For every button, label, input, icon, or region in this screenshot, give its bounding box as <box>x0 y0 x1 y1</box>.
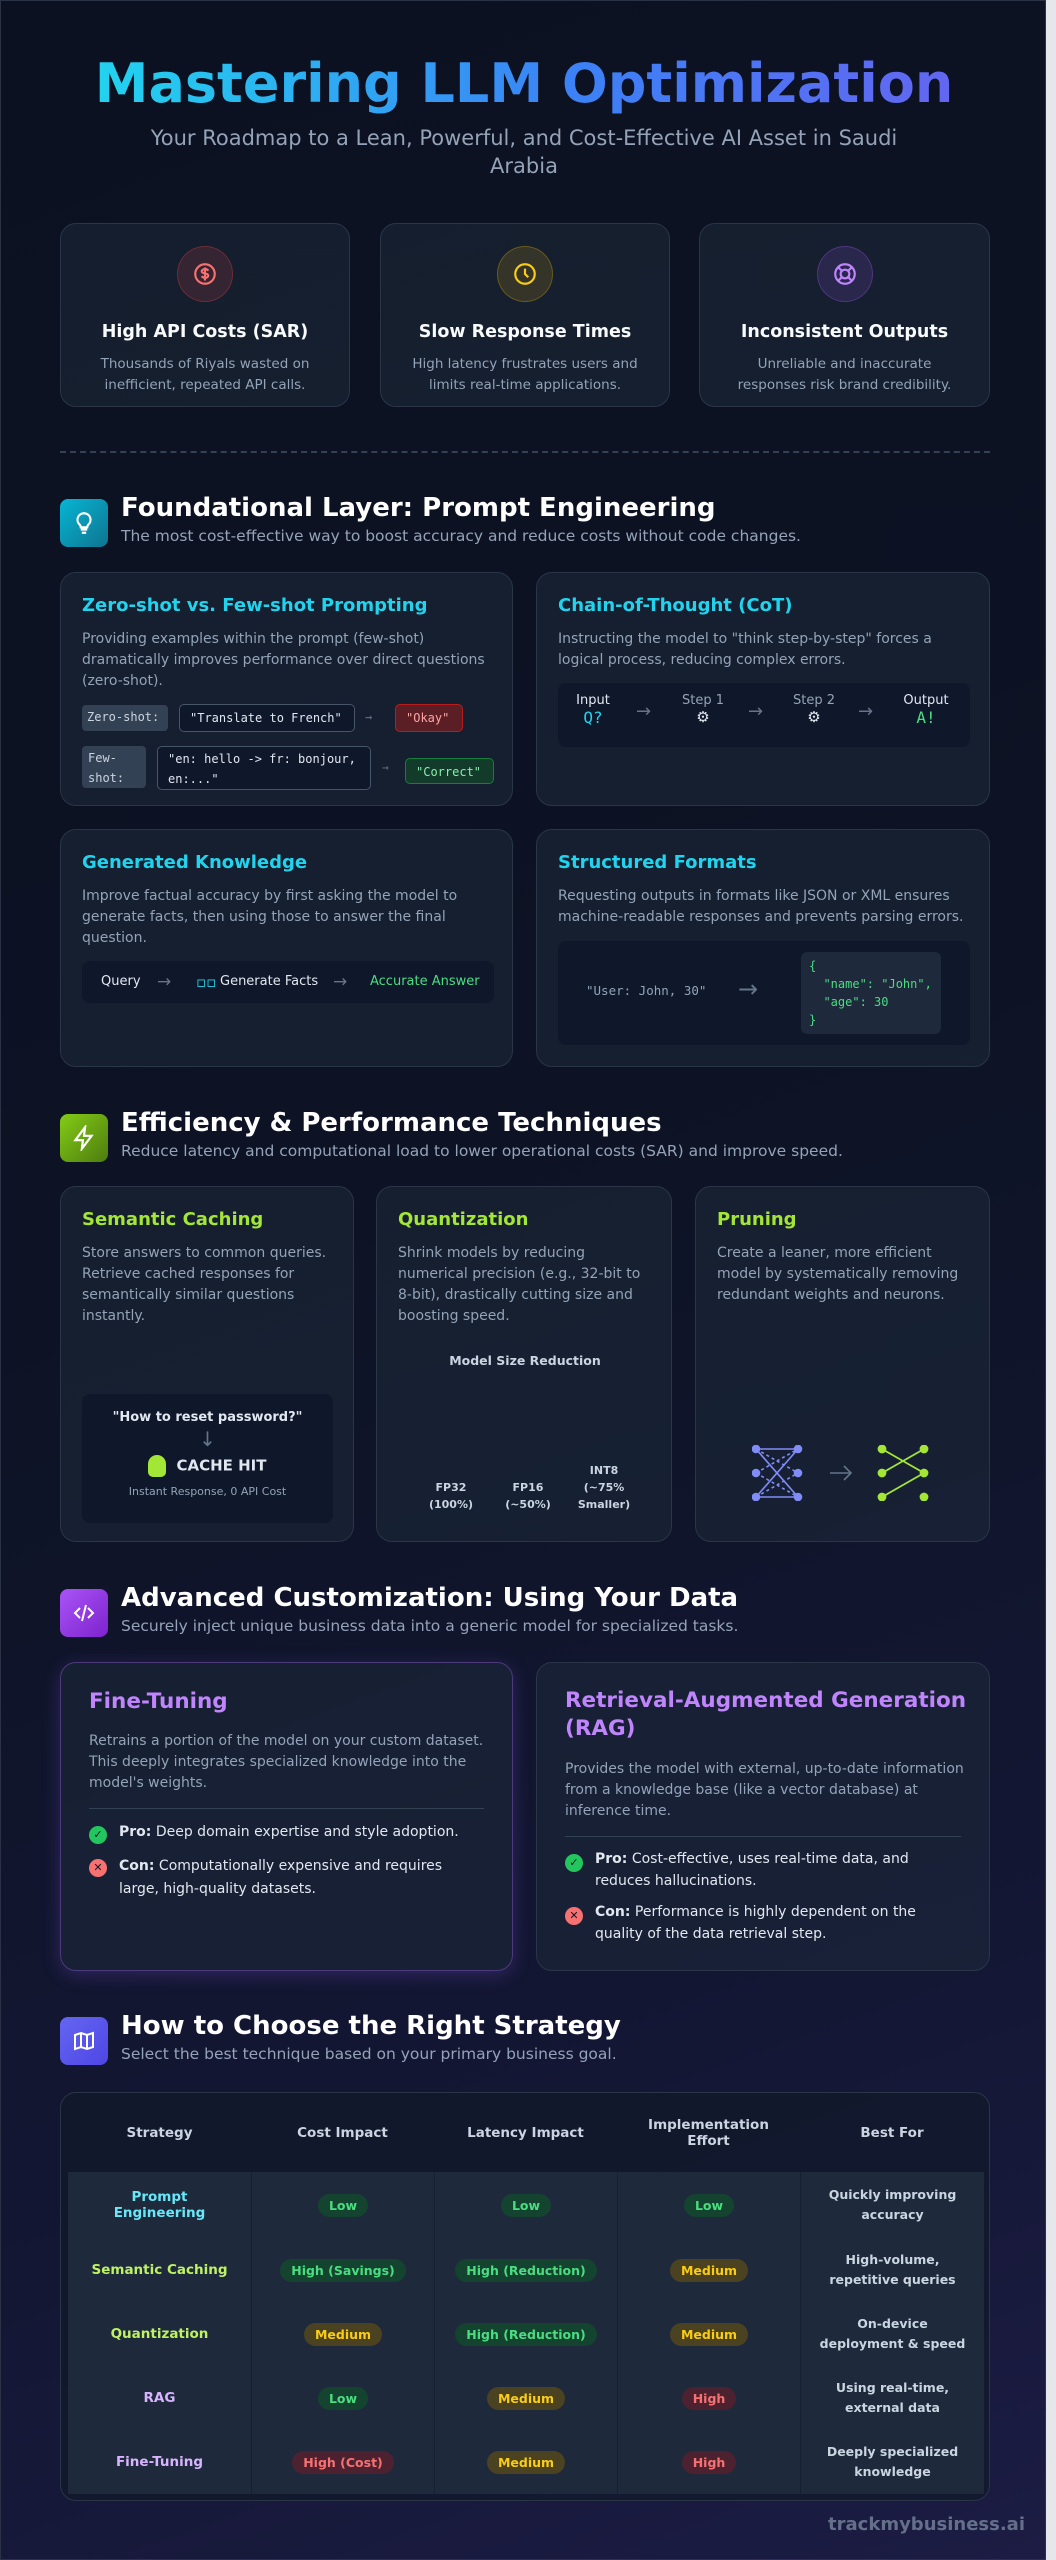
table: strategy comparison: High <box>693 2454 725 2470</box>
panel: zero-shot vs few-shot <box>60 572 513 806</box>
diagram: CoT steps: → <box>858 701 873 722</box>
table: strategy comparison: Medium <box>498 2454 554 2470</box>
panel: chain of thought <box>536 572 990 806</box>
table: strategy comparison: Low <box>329 2390 357 2406</box>
diagram: cache hit: CACHE HIT <box>176 1456 266 1474</box>
diagram: CoT steps <box>558 683 970 747</box>
diagram: text to JSON: { "name": "John", "age": 30 } <box>809 959 932 1027</box>
zero-shot example row: Zero-shot: <box>87 710 159 724</box>
table: strategy comparison: RAG <box>144 2390 175 2406</box>
diagram: knowledge flow: ▫▫ <box>196 973 216 991</box>
chart: model size reduction: Smaller) <box>578 1498 630 1511</box>
table: strategy comparison: Cost Impact <box>297 2124 388 2140</box>
table: strategy comparison: Medium <box>681 2326 737 2342</box>
panel: quantization: Quantization <box>398 1209 528 1230</box>
chart: model size reduction: (~50%) <box>505 1498 551 1511</box>
icon: currency <box>177 246 233 302</box>
panel: generated knowledge: Improve factual accuracy by first asking the model to generate facts, then using those to answer the final question. <box>82 888 457 946</box>
diagram: knowledge flow: Generate Facts <box>220 974 318 989</box>
panel: fine-tuning: Retrains a portion of the model on your custom dataset. This deeply integrates specialized knowledge into the model's weights. <box>89 1733 483 1791</box>
few-shot example row: shot: <box>88 771 124 785</box>
heading: choose strategy <box>60 2011 621 2065</box>
diagram: text to JSON <box>558 941 970 1045</box>
panel: pruning: Create a leaner, more efficient model by systematically removing redundant weights and neurons. <box>717 1245 958 1303</box>
zero-shot example row: → <box>365 710 372 724</box>
chart: model size reduction: FP32 <box>436 1481 466 1494</box>
con item: ✕ <box>569 1909 579 1922</box>
table: strategy comparison: High (Savings) <box>291 2262 395 2278</box>
panel: high API costs: Thousands of Riyals wasted on <box>101 356 309 372</box>
diagram: CoT steps: → <box>748 701 763 722</box>
panel: zero-shot vs few-shot: Providing examples within the prompt (few-shot) dramatically improves performance over direct questions (zero-shot). <box>82 631 485 689</box>
diagram: CoT steps: Step 2 <box>793 693 835 708</box>
pro item: Pro: Deep domain expertise and style adoption. <box>119 1824 459 1840</box>
table: strategy comparison: On-device <box>857 2316 928 2331</box>
subtitle: Your Roadmap to a Lean, Powerful, and Cost-Effective AI Asset in Saudi Arabia <box>151 126 897 178</box>
icon: lightbulb <box>60 499 108 547</box>
panel: slow response <box>380 223 670 407</box>
table: strategy comparison: Implementation <box>648 2116 769 2132</box>
panel: RAG: Retrieval-Augmented Generation (RAG) <box>565 1688 966 1741</box>
table: strategy comparison: Engineering <box>114 2205 205 2221</box>
heading: choose strategy: Select the best technique based on your primary business goal. <box>121 2045 617 2063</box>
heading: prompt engineering: Foundational Layer: Prompt Engineering <box>121 493 715 523</box>
table: strategy comparison: High <box>693 2390 725 2406</box>
footer: brand: trackmybusiness.ai <box>828 2514 1025 2535</box>
chart: model size reduction <box>429 1353 630 1511</box>
diagram: CoT steps: Q? <box>583 708 603 727</box>
chart: model size reduction: (100%) <box>429 1498 473 1511</box>
table: strategy comparison: Best For <box>860 2124 924 2140</box>
panel: chain of thought: Chain-of-Thought (CoT) <box>558 595 792 616</box>
few-shot example row: → <box>382 761 389 774</box>
table: strategy comparison: High (Cost) <box>303 2454 383 2470</box>
table: strategy comparison: Fine-Tuning <box>116 2454 203 2470</box>
table: strategy comparison: Latency Impact <box>467 2124 584 2140</box>
panel: slow response: limits real-time applications. <box>429 377 621 393</box>
zero-shot example row <box>82 704 463 732</box>
panel: quantization: Shrink models by reducing numerical precision (e.g., 32-bit to 8-bit), drastically cutting size and boosting speed. <box>398 1245 640 1324</box>
table: strategy comparison: Deeply specialized <box>827 2444 958 2459</box>
diagram: knowledge flow: → <box>333 972 347 992</box>
table: strategy comparison <box>60 2092 990 2501</box>
panel: semantic caching <box>60 1186 354 1542</box>
heading: choose strategy: How to Choose the Right Strategy <box>121 2011 621 2041</box>
chart: model size reduction: Model Size Reduction <box>449 1353 601 1368</box>
icon: lightning <box>60 1114 108 1162</box>
diagram: CoT steps: Output <box>903 693 949 708</box>
con item: Con: Computationally expensive and requires <box>119 1858 442 1874</box>
panel: inconsistent outputs <box>699 223 990 407</box>
panel: pruning <box>695 1186 990 1542</box>
diagram: text to JSON: → <box>738 975 758 1003</box>
diagram: knowledge flow: → <box>157 972 171 992</box>
icon: lifebuoy <box>816 246 872 302</box>
table: strategy comparison: Medium <box>681 2262 737 2278</box>
diagram: CoT steps: Input <box>576 693 610 708</box>
con item: ✕ <box>93 1861 103 1874</box>
panel: high API costs <box>60 223 350 407</box>
pro item: Pro: Cost-effective, uses real-time data, and reduces hallucinations. <box>595 1851 909 1889</box>
table: strategy comparison: Low <box>329 2198 357 2212</box>
heading: advanced customization: Securely inject unique business data into a generic model for specialized tasks. <box>121 1617 738 1635</box>
panel: inconsistent outputs: Unreliable and inaccurate <box>758 356 931 372</box>
panel: slow response: High latency frustrates users and <box>412 356 638 372</box>
table: strategy comparison: High (Reduction) <box>466 2262 586 2278</box>
con item: Con: Performance is highly dependent on the quality of the data retrieval step. <box>595 1904 916 1942</box>
panel: inconsistent outputs: responses risk brand credibility. <box>738 377 951 393</box>
pro item: ✓ <box>93 1828 103 1841</box>
panel: RAG <box>536 1662 990 1971</box>
heading: prompt engineering <box>60 493 801 547</box>
diagram: knowledge flow <box>82 961 494 1003</box>
diagram: CoT steps: Step 1 <box>682 693 724 708</box>
diagram: CoT steps: A! <box>916 708 936 727</box>
pro item: ✓ <box>569 1856 579 1869</box>
few-shot example row: "Correct" <box>416 765 481 779</box>
diagram: text to JSON: "User: John, 30" <box>586 983 706 998</box>
heading: efficiency <box>60 1108 843 1162</box>
table: strategy comparison: Using real-time, <box>836 2380 949 2395</box>
table: strategy comparison: High (Reduction) <box>466 2326 586 2342</box>
icon: code <box>60 1589 108 1637</box>
zero-shot example row: "Translate to French" <box>190 711 342 725</box>
panel: structured formats: Structured Formats <box>558 852 757 873</box>
panel: slow response: Slow Response Times <box>419 322 631 342</box>
heading: prompt engineering: The most cost-effective way to boost accuracy and reduce costs without code changes. <box>121 527 801 545</box>
diagram: CoT steps: → <box>636 701 651 722</box>
table: strategy comparison: accuracy <box>861 2207 924 2222</box>
heading: efficiency: Reduce latency and computational load to lower operational costs (SAR) and improve speed. <box>121 1142 843 1160</box>
diagram: CoT steps: ⚙ <box>807 708 821 726</box>
con item: large, high-quality datasets. <box>119 1881 316 1897</box>
panel: chain of thought: Instructing the model to "think step-by-step" forces a logical process, reducing complex errors. <box>558 631 932 668</box>
icon: pruned network <box>752 1445 928 1501</box>
panel: structured formats: Requesting outputs in formats like JSON or XML ensures machine-readable responses and prevents parsing errors. <box>558 888 964 925</box>
diagram: knowledge flow: Query <box>101 974 141 989</box>
table: strategy comparison: Semantic Caching <box>92 2262 227 2278</box>
table: strategy comparison: Medium <box>498 2390 554 2406</box>
few-shot example row: Few- <box>88 751 117 765</box>
table: strategy comparison: knowledge <box>854 2464 931 2479</box>
table: strategy comparison: Strategy <box>126 2124 193 2140</box>
panel: semantic caching: Semantic Caching <box>82 1209 263 1230</box>
table: strategy comparison: Medium <box>315 2326 371 2342</box>
chart: model size reduction: INT8 <box>590 1464 618 1477</box>
panel: structured formats <box>536 829 990 1067</box>
diagram: knowledge flow: Accurate Answer <box>370 974 480 989</box>
heading: efficiency: Efficiency & Performance Techniques <box>121 1108 662 1138</box>
panel: inconsistent outputs: Inconsistent Outputs <box>741 322 948 342</box>
diagram: CoT steps: ⚙ <box>696 708 710 726</box>
chart: model size reduction: FP16 <box>513 1481 543 1494</box>
panel: high API costs: High API Costs (SAR) <box>102 322 308 342</box>
panel: generated knowledge <box>60 829 513 1067</box>
table: strategy comparison: repetitive queries <box>829 2272 956 2287</box>
panel: generated knowledge: Generated Knowledge <box>82 852 307 873</box>
zero-shot example row: "Okay" <box>406 711 449 725</box>
panel: zero-shot vs few-shot: Zero-shot vs. Few-shot Prompting <box>82 595 427 616</box>
heading: advanced customization: Advanced Customization: Using Your Data <box>121 1583 738 1613</box>
table: strategy comparison: Quantization <box>111 2326 208 2342</box>
con item <box>89 1858 442 1897</box>
chart: model size reduction: (~75% <box>584 1481 624 1494</box>
panel: RAG: Provides the model with external, up-to-date information from a knowledge base (like a vector database) at inference time. <box>565 1761 964 1819</box>
table: strategy comparison: High-volume, <box>846 2252 939 2267</box>
table: strategy comparison: deployment & speed <box>820 2336 965 2351</box>
panel: semantic caching: Store answers to common queries. Retrieve cached responses for semantically similar questions instantly. <box>82 1245 326 1324</box>
panel: fine-tuning: Fine-Tuning <box>89 1689 228 1714</box>
icon: map <box>60 2017 108 2065</box>
table: strategy comparison: Quickly improving <box>829 2187 956 2202</box>
heading: advanced customization <box>60 1583 738 1637</box>
panel: fine-tuning <box>60 1662 513 1971</box>
diagram: cache hit <box>82 1394 333 1523</box>
few-shot example row <box>82 746 494 790</box>
few-shot example row: "en: hello -> fr: bonjour, <box>168 752 356 766</box>
diagram: cache hit: Instant Response, 0 API Cost <box>129 1485 286 1498</box>
table: strategy comparison: Prompt <box>131 2189 188 2205</box>
panel: pruning: Pruning <box>717 1209 797 1230</box>
panel: high API costs: inefficient, repeated API calls. <box>105 377 305 393</box>
diagram: cache hit: ↓ <box>199 1427 216 1451</box>
diagram: cache hit: "How to reset password?" <box>113 1410 302 1425</box>
few-shot example row: en:..." <box>168 772 219 786</box>
table: strategy comparison: Low <box>695 2198 723 2212</box>
icon: clock <box>497 246 553 302</box>
panel: quantization <box>376 1186 672 1542</box>
table: strategy comparison: external data <box>845 2400 940 2415</box>
title: Mastering LLM Optimization <box>95 52 953 115</box>
table: strategy comparison: Effort <box>687 2132 730 2148</box>
table: strategy comparison: Low <box>512 2198 540 2212</box>
